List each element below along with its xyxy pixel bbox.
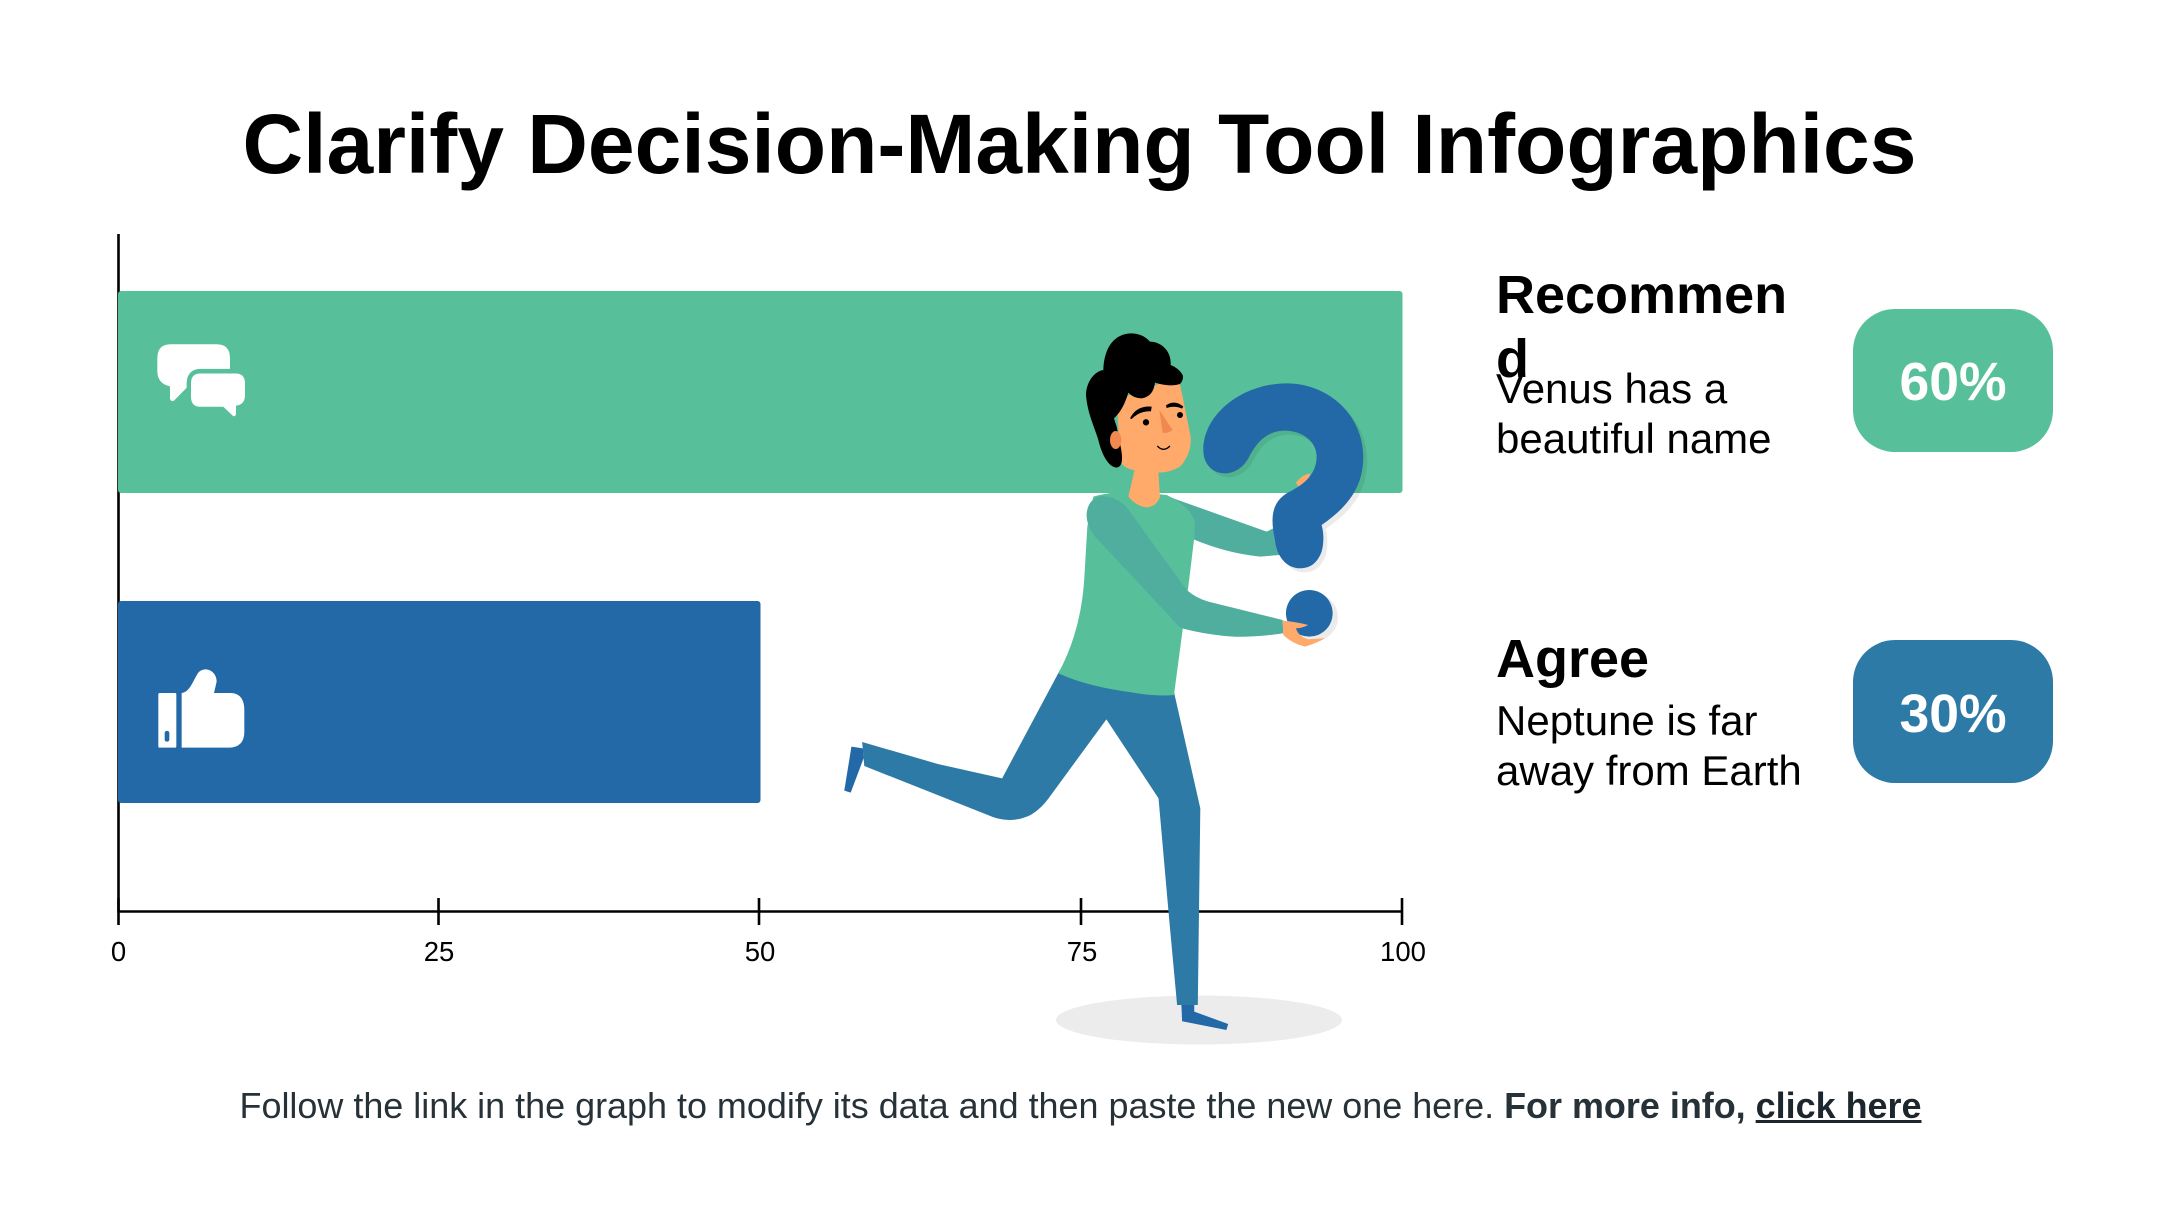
- badge: 30%: 30%: [1899, 684, 2007, 744]
- text: agree description: Neptune is far: [1496, 697, 1757, 744]
- face: [1117, 377, 1191, 472]
- rear hand: [1296, 473, 1310, 487]
- badge: 30%: [1853, 640, 2053, 783]
- character: upper body with question mark: [1058, 333, 1367, 695]
- chart axes: [118, 234, 1402, 925]
- axis tick labels: 75: [1067, 936, 1097, 967]
- text: recommend description: Venus has a: [1496, 365, 1727, 412]
- torso: [1058, 492, 1195, 695]
- neck: [1128, 468, 1160, 507]
- question mark: [1203, 383, 1363, 568]
- heading: agree: Agree: [1496, 629, 1649, 689]
- question mark shadow: [1207, 387, 1367, 572]
- text: agree description: away from Earth: [1496, 747, 1802, 794]
- bar: agree: [118, 601, 760, 803]
- axis tick labels: [111, 936, 1426, 967]
- question dot shadow: [1290, 593, 1338, 641]
- ground shadow: [1056, 996, 1342, 1044]
- ear: [1110, 431, 1121, 449]
- badge: 60%: 60%: [1899, 353, 2007, 412]
- heading: recommend: Recommend: [1496, 265, 1787, 389]
- nose: [1159, 410, 1173, 433]
- axis tick labels: 0: [111, 936, 126, 967]
- icon: speech bubbles: [157, 344, 245, 416]
- axis tick labels: 25: [424, 936, 454, 967]
- badge: 60%: [1853, 308, 2053, 452]
- bar: recommend: [118, 291, 1402, 493]
- eyes and brows: [1130, 403, 1183, 425]
- smile: [1157, 446, 1170, 449]
- front hand: [1283, 621, 1325, 647]
- title: Clarify Decision-Making Tool Infographics: [242, 97, 1916, 191]
- axis tick labels: 100: [1380, 936, 1426, 967]
- footer note: Follow the link in the graph to modify its data and then paste the new one here. For more info, click here: [240, 1085, 1921, 1126]
- text: agree description: [1496, 697, 1802, 794]
- rear arm: [1167, 496, 1279, 557]
- text: recommend description: beautiful name: [1496, 415, 1772, 462]
- character: legs: [844, 670, 1228, 1030]
- axis tick labels: 50: [745, 936, 775, 967]
- icon: thumbs up: [158, 669, 244, 748]
- question dot: [1286, 590, 1333, 637]
- hair: [1086, 333, 1183, 468]
- front arm: [1087, 496, 1283, 637]
- text: recommend description: [1496, 365, 1772, 462]
